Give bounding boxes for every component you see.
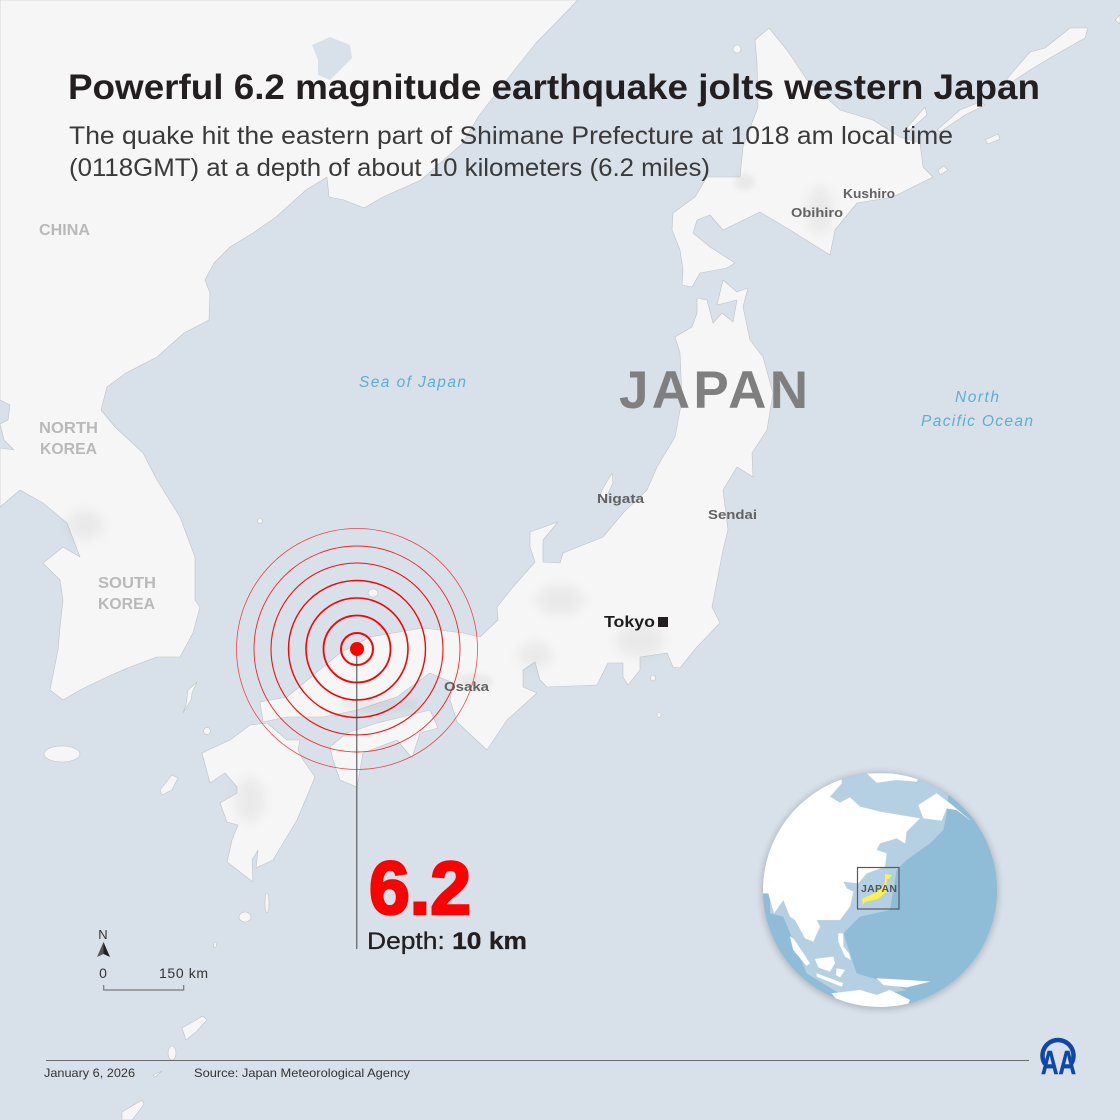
lake: Khanka	[312, 37, 352, 80]
locator globe	[750, 760, 999, 1013]
Japan on globe	[862, 874, 892, 905]
scale bar	[99, 965, 208, 990]
city label: Kushiro: Kushiro	[843, 186, 895, 201]
footer source: Source: Japan Meteorological Agency	[194, 1066, 410, 1080]
land: Kyushu	[202, 723, 315, 882]
Japan locator label: JAPAN	[861, 883, 897, 895]
epicentre rings	[236, 528, 478, 770]
land: Asian mainland and Korean Peninsula	[0, 0, 578, 700]
AA logo: AA	[1041, 1044, 1076, 1081]
globe land	[763, 773, 970, 1007]
magnitude value: 6.2	[369, 846, 471, 930]
north arrow	[97, 927, 110, 957]
city label: Nigata: Nigata	[597, 491, 645, 506]
sea label: Sea of Japan: Sea of Japan	[359, 374, 466, 391]
country label: South Korea	[98, 575, 156, 613]
country label: South Korea: SOUTH	[98, 575, 156, 592]
city label: Sendai: Sendai	[708, 507, 757, 522]
country label: North Korea: KOREA	[40, 441, 97, 458]
map: urban texture on land	[67, 174, 832, 822]
subtitle: (0118GMT) at a depth of about 10 kilometers (6.2 miles)	[69, 154, 710, 182]
land: Shikoku	[330, 710, 438, 787]
north arrow: N	[98, 927, 108, 942]
epicentre dot	[350, 642, 364, 656]
land: Honshu	[260, 280, 773, 750]
globe shelf seas	[770, 773, 950, 1000]
footer date: January 6, 2026	[44, 1066, 135, 1080]
footer rule	[46, 1060, 1029, 1062]
globe shadow	[761, 772, 999, 1010]
city label: Osaka: Osaka	[444, 679, 490, 694]
country label: China: CHINA	[39, 222, 90, 239]
sea label: North Pacific Ocean	[921, 389, 1033, 430]
land: Hokkaido	[672, 28, 933, 287]
country label: Japan: JAPAN	[619, 361, 808, 420]
subtitle: The quake hit the eastern part of Shimane Prefecture at 1018 am local time	[69, 122, 953, 150]
AA logo	[1041, 1040, 1076, 1081]
subtitle	[69, 122, 953, 182]
Japan locator box	[858, 868, 899, 909]
sea label: North Pacific Ocean: Pacific Ocean	[921, 413, 1033, 430]
scale bar: 0	[99, 965, 107, 981]
scale bar: 150 km	[159, 965, 208, 981]
title: Powerful 6.2 magnitude earthquake jolts western Japan	[68, 68, 1040, 107]
depth label: Depth: 10 km	[367, 928, 527, 955]
leader line	[356, 656, 358, 949]
country label: South Korea: KOREA	[98, 596, 155, 613]
city label: Obihiro: Obihiro	[791, 205, 843, 220]
sea label: North Pacific Ocean: North	[955, 389, 999, 406]
city label and marker: Tokyo: Tokyo	[604, 614, 655, 631]
globe ocean	[763, 773, 997, 1007]
country label: North Korea: NORTH	[39, 420, 98, 437]
country label: North Korea	[39, 420, 98, 458]
